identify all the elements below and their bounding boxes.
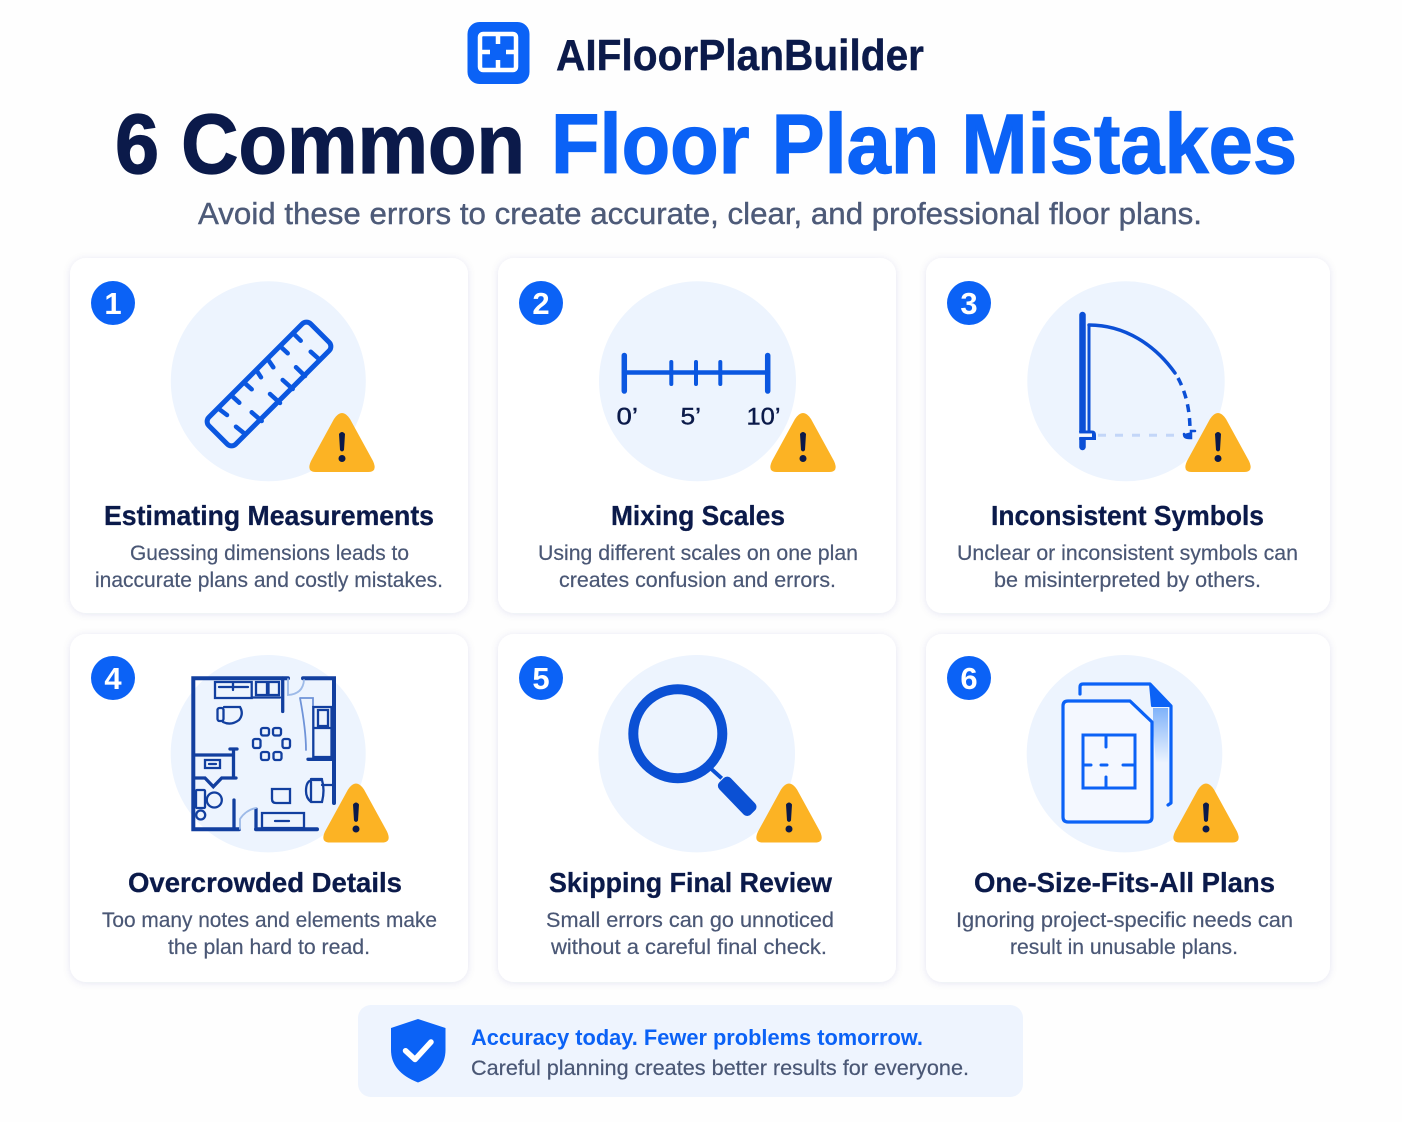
icon: logo mark xyxy=(468,22,530,84)
card title: Mixing Scales xyxy=(611,500,785,531)
number badge 6 xyxy=(947,656,991,700)
card description: Ignoring project-specific needs can xyxy=(956,909,1293,932)
card description: creates confusion and errors. xyxy=(559,569,836,592)
panel: mixing scales xyxy=(498,258,896,613)
banner heading: Accuracy today. Fewer problems tomorrow. xyxy=(471,1025,923,1050)
icon: warning xyxy=(1173,784,1239,842)
title: Floor Plan Mistakes xyxy=(551,97,1297,191)
number badge 5 xyxy=(519,656,563,700)
card description: the plan hard to read. xyxy=(168,936,370,959)
number badge 4 xyxy=(91,656,135,700)
logo xyxy=(468,22,924,84)
icon: warning xyxy=(323,784,389,842)
icon: warning xyxy=(770,413,836,472)
card title: Inconsistent Symbols xyxy=(991,500,1264,531)
card description xyxy=(957,542,1298,592)
card description: result in unusable plans. xyxy=(1010,936,1238,959)
card title: Skipping Final Review xyxy=(549,867,832,898)
icon: crowded floor plan xyxy=(193,678,334,829)
icon background circle xyxy=(171,655,366,852)
card title: Overcrowded Details xyxy=(128,867,402,898)
icon: shield check xyxy=(391,1019,446,1082)
icon background circle xyxy=(171,281,366,481)
icon background circle xyxy=(599,281,796,481)
icon: door swing symbol xyxy=(1079,315,1195,447)
panel: overcrowded details xyxy=(70,634,468,982)
card description xyxy=(546,909,834,959)
number badge 5: 5 xyxy=(532,661,550,696)
icon: warning xyxy=(756,784,822,842)
icon: ruler xyxy=(205,320,333,448)
scale labels: 5’ xyxy=(680,404,701,430)
title: 6 Common xyxy=(115,97,525,191)
title xyxy=(115,97,1297,191)
number badge 4: 4 xyxy=(104,661,122,696)
number badge 1 xyxy=(91,281,135,325)
card description: inaccurate plans and costly mistakes. xyxy=(95,569,443,592)
card description: Using different scales on one plan xyxy=(538,542,858,565)
subtitle: Avoid these errors to create accurate, clear, and professional floor plans. xyxy=(198,196,1202,231)
number badge 2 xyxy=(519,281,563,325)
card title: One-Size-Fits-All Plans xyxy=(974,867,1275,898)
card description xyxy=(102,909,437,959)
banner text: Careful planning creates better results for everyone. xyxy=(471,1057,969,1080)
logo wordmark: AIFloorPlanBuilder xyxy=(556,31,924,80)
number badge 6: 6 xyxy=(960,661,978,696)
panel: one-size-fits-all plans xyxy=(926,634,1330,982)
icon: warning xyxy=(1185,413,1251,472)
card description: without a careful final check. xyxy=(550,936,827,959)
icon background circle xyxy=(1027,655,1222,852)
scale labels: 10’ xyxy=(746,404,780,430)
card description: Guessing dimensions leads to xyxy=(130,542,409,565)
icon background circle xyxy=(598,655,795,852)
number badge 2: 2 xyxy=(532,286,550,321)
number badge 3: 3 xyxy=(960,286,978,321)
scale labels: 0’ xyxy=(616,404,638,430)
icon: warning xyxy=(309,413,375,472)
icon background circle xyxy=(1027,281,1225,481)
panel: inconsistent symbols xyxy=(926,258,1330,613)
number badge 3 xyxy=(947,281,991,325)
panel: skipping final review xyxy=(498,634,896,982)
card description xyxy=(95,542,443,592)
scale labels xyxy=(616,404,780,430)
card description: be misinterpreted by others. xyxy=(994,569,1261,592)
icon: magnifying glass xyxy=(633,689,759,818)
card description: Too many notes and elements make xyxy=(102,909,437,932)
number badge 1: 1 xyxy=(104,286,122,321)
icon: scale bar xyxy=(624,356,768,391)
card description xyxy=(956,909,1293,959)
card title: Estimating Measurements xyxy=(104,500,434,531)
icon: stacked documents xyxy=(1063,684,1171,822)
card description xyxy=(538,542,858,592)
panel: estimating measurements xyxy=(70,258,468,613)
card description: Small errors can go unnoticed xyxy=(546,909,834,932)
card description: Unclear or inconsistent symbols can xyxy=(957,542,1298,565)
callout: footer banner xyxy=(358,1005,1023,1097)
